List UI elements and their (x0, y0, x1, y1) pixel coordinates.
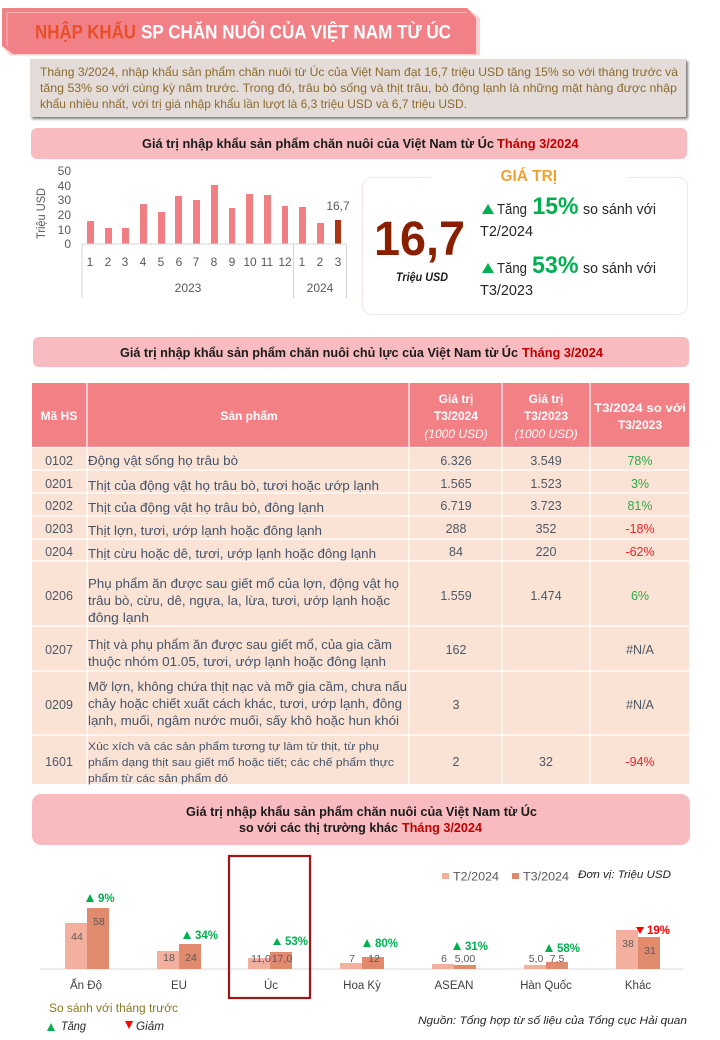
comparison with same month last year: so sánh với (583, 261, 656, 277)
comparison with same month last year (480, 252, 656, 299)
market: ASEAN: 31% (465, 941, 488, 953)
row 0204: 0204 (45, 545, 73, 559)
comparison legend (47, 1003, 178, 1033)
y axis labels: 50 (58, 164, 71, 178)
month labels: 7 (193, 255, 200, 269)
market: Hàn Quốc: Hàn Quốc (520, 980, 572, 992)
month labels: 8 (211, 255, 218, 269)
year labels: 2024 (307, 281, 334, 295)
row 1601: Xúc xích và các sản phẩm tương tự làm từ thịt, từ phụ (88, 741, 379, 753)
table header: T3/2023 (618, 418, 662, 432)
bars (87, 185, 341, 244)
market: ASEAN (432, 941, 488, 992)
row 0202: 0202 (45, 499, 73, 513)
title text: NHẬP KHẨU (35, 22, 136, 44)
market: Úc: 17,0 (272, 953, 292, 965)
row 0202: Thịt của động vật họ trâu bò, đông lạnh (88, 501, 324, 515)
market: Úc (248, 936, 308, 992)
headline unit: Triệu USD (396, 272, 448, 284)
row 0209: Mỡ lợn, không chứa thịt nạc và mỡ gia cầm, chưa nấu (88, 680, 407, 694)
row 0209 (45, 680, 655, 728)
row 0203: 288 (446, 522, 466, 536)
comparison legend: So sánh với tháng trước (49, 1003, 178, 1015)
row 0209: 0209 (45, 698, 73, 712)
market: Hoa Kỳ: Hoa Kỳ (343, 980, 381, 992)
row 0203: 0203 (45, 522, 73, 536)
row 0202 (45, 499, 653, 515)
row 0102: 3.549 (530, 454, 562, 468)
section heading: monthly value: Tháng 3/2024 (497, 137, 579, 151)
market: Hoa Kỳ: 80% (375, 938, 398, 950)
market: EU (157, 930, 218, 992)
row 0206: 1.474 (530, 589, 562, 603)
row 0206: đông lạnh (88, 611, 149, 625)
market: Khác: 19% (647, 925, 670, 937)
value card (362, 166, 688, 314)
month labels: 6 (176, 255, 183, 269)
comparison with previous month (480, 193, 656, 240)
market: Hàn Quốc: 5,0 (529, 953, 543, 965)
row 0209: chảy hoặc chiết xuất cách khác, tươi, ướp lạnh, đông (88, 697, 402, 711)
row 0204: 84 (449, 545, 463, 559)
y axis labels (58, 164, 71, 251)
row 0202: 6.719 (440, 499, 472, 513)
market: Ấn Độ: 58 (93, 916, 105, 928)
month labels: 1 (87, 255, 94, 269)
row 0201: 3% (631, 477, 649, 491)
intro text panel: tăng 53% so với cùng kỳ năm trước. Trong đó, trâu bò sống và thịt trâu, bò đông lạnh là những mặt hàng được nhập (40, 81, 677, 95)
y axis labels: 10 (58, 223, 71, 237)
market: Khác: 31 (644, 945, 656, 957)
section heading: other markets: so với các thị trường khác (239, 821, 398, 835)
row 0206 (45, 577, 649, 625)
market: Ấn Độ (65, 893, 115, 992)
row 0207: 0207 (45, 643, 73, 657)
row 1601: phẩm dạng thịt sau giết mổ hoặc tiết; các chế phẩm thực (88, 757, 395, 769)
table header: Giá trị (439, 392, 473, 406)
comparison with same month last year: T3/2023 (480, 283, 533, 299)
row 0206: Phụ phẩm ăn được sau giết mổ của lợn, động vật họ (88, 577, 399, 591)
month labels: 1 (299, 255, 306, 269)
row 0201: 0201 (45, 477, 73, 491)
market: Hàn Quốc: 58% (557, 943, 580, 955)
row 0203 (45, 522, 655, 538)
row 0206: 0206 (45, 589, 73, 603)
row 1601: 2 (453, 755, 460, 769)
section heading: main products: Tháng 3/2024 (522, 346, 603, 360)
table header: (1000 USD) (424, 427, 488, 441)
row 0102: 78% (627, 454, 653, 468)
comparison with previous month: so sánh với (583, 202, 656, 218)
table body background (32, 447, 689, 784)
market: EU: 34% (195, 930, 218, 942)
product table (32, 383, 689, 785)
market: Úc: 11,0 (251, 953, 271, 965)
market: Úc: Úc (264, 979, 278, 992)
section heading: main products: Giá trị nhập khẩu sản phẩm chăn nuôi chủ lực của Việt Nam từ Úc (120, 345, 518, 360)
row 0207: #N/A (626, 643, 655, 657)
month labels: 2 (105, 255, 112, 269)
title banner (2, 8, 480, 56)
section heading: main products (33, 337, 689, 367)
table header: T3/2023 (524, 409, 568, 423)
comparison with previous month: Tăng (497, 202, 527, 218)
row 0207: thuộc nhóm 01.05, tươi, ướp lạnh hoặc đông lạnh (88, 655, 386, 669)
row 1601: 32 (539, 755, 553, 769)
row 0207: 162 (446, 643, 466, 657)
row 0209: lạnh, muối, ngâm nước muối, sấy khô hoặc hun khói (88, 714, 399, 728)
row 1601: 1601 (45, 755, 73, 769)
market: Úc: 53% (285, 936, 308, 948)
row 0207: Thịt và phụ phẩm ăn được sau giết mổ, của gia cầm (88, 638, 392, 652)
highlight box: Úc (229, 856, 310, 998)
row 0102: Động vật sống họ trâu bò (88, 454, 238, 468)
row 0102 (45, 454, 653, 468)
intro text panel: Tháng 3/2024, nhập khẩu sản phẩm chăn nuôi từ Úc của Việt Nam đạt 16,7 triệu USD tăng 15% so với tháng trước và (40, 64, 678, 79)
table header: Sản phẩm (220, 409, 278, 423)
month labels: 4 (140, 255, 147, 269)
y axis labels: 30 (58, 193, 71, 207)
comparison with previous month: T2/2024 (480, 224, 533, 240)
row 0207 (45, 638, 655, 669)
comparison legend: Tăng (61, 1021, 87, 1033)
row 0204 (45, 545, 655, 561)
row 0102: 6.326 (440, 454, 472, 468)
row 0203: 352 (536, 522, 556, 536)
row 0204: Thịt cừu hoặc dê, tươi, ướp lạnh hoặc đông lạnh (88, 547, 376, 561)
table header: T3/2024 (434, 409, 478, 423)
month labels: 9 (229, 255, 236, 269)
market: EU: EU (171, 980, 187, 992)
title text: SP CHĂN NUÔI CỦA VIỆT NAM TỪ ÚC (141, 22, 451, 44)
year labels (175, 281, 334, 295)
table header (32, 383, 689, 447)
month labels: 3 (122, 255, 129, 269)
row 0202: 81% (627, 499, 653, 513)
comparison with same month last year: 53% (532, 252, 578, 279)
year labels: 2023 (175, 281, 202, 295)
comparison legend: Giảm (136, 1021, 164, 1033)
row 1601: phẩm từ các sản phẩm đó (88, 773, 228, 785)
bar chart: monthly import value (36, 164, 350, 298)
month labels: 12 (278, 255, 292, 269)
card heading: GIÁ TRỊ (500, 166, 557, 185)
market: Khác (616, 925, 670, 992)
row 0203: Thịt lợn, tươi, ướp lạnh hoặc đông lạnh (88, 524, 322, 538)
row 0102: 0102 (45, 454, 73, 468)
month labels: 11 (261, 255, 274, 269)
y axis title: Triệu USD (36, 188, 48, 239)
market: ASEAN: 6 (441, 953, 447, 965)
market: Hoa Kỳ (340, 938, 398, 992)
y axis labels: 20 (58, 208, 71, 222)
row 0201: 1.565 (440, 477, 472, 491)
market: EU: 18 (163, 952, 175, 964)
market: Hoa Kỳ: 7 (349, 953, 355, 965)
row 0201: 1.523 (530, 477, 562, 491)
y axis labels: 0 (64, 237, 71, 251)
source note: Nguồn: Tổng hợp từ số liệu của Tổng cục Hải quan (418, 1015, 687, 1027)
row 0201: Thịt của động vật họ trâu bò, tươi hoặc ướp lạnh (88, 479, 379, 493)
market: ASEAN: 5,00 (455, 953, 475, 965)
intro text panel: khẩu nhiều nhất, với trị giá nhập khẩu lần lượt là 6,3 triệu USD và 6,7 triệu USD. (40, 97, 467, 111)
table header: Giá trị (529, 392, 563, 406)
month labels: 2 (317, 255, 324, 269)
y axis labels: 40 (58, 179, 71, 193)
row 0209: 3 (453, 698, 460, 712)
month labels: 5 (158, 255, 165, 269)
market: Hàn Quốc: 7,5 (550, 953, 564, 965)
table grid (32, 383, 689, 784)
row 0204: -62% (625, 545, 655, 559)
table header: Mã HS (41, 409, 77, 423)
row 0202: 3.723 (530, 499, 562, 513)
market: ASEAN: ASEAN (434, 980, 474, 992)
market comparison chart (40, 856, 683, 998)
month labels: 3 (335, 255, 342, 269)
legend (442, 872, 570, 884)
market: EU: 24 (185, 952, 197, 964)
month labels (87, 255, 342, 269)
table header: T3/2024 so với (594, 401, 686, 415)
section heading: monthly value: Giá trị nhập khẩu sản phẩm chăn nuôi của Việt Nam từ Úc (142, 136, 494, 151)
section heading: other markets: Giá trị nhập khẩu sản phẩm chăn nuôi của Việt Nam từ Úc (186, 804, 537, 819)
market: Khác: 38 (622, 938, 634, 950)
market: Hoa Kỳ: 12 (368, 953, 380, 965)
section heading: monthly value (31, 128, 687, 159)
headline number: 16,7 (374, 213, 465, 266)
baseline (40, 968, 683, 970)
unit note: Đơn vị: Triệu USD (578, 869, 671, 881)
row 0206: trâu bò, cừu, dê, ngựa, la, lừa, tươi, ướp lạnh hoặc (88, 594, 390, 608)
comparison with same month last year: Tăng (497, 261, 527, 277)
row 0206: 6% (631, 589, 649, 603)
market: Ấn Độ: 9% (98, 893, 115, 905)
section heading: other markets: Tháng 3/2024 (402, 821, 482, 835)
row 1601 (45, 741, 655, 785)
row 1601: -94% (625, 755, 655, 769)
section heading: other markets (32, 794, 690, 845)
legend: T2/2024 (453, 872, 500, 884)
comparison with previous month: 15% (532, 193, 578, 220)
row 0203: -18% (625, 522, 655, 536)
row 0209: #N/A (626, 698, 655, 712)
market: Hàn Quốc (520, 943, 580, 992)
axis lines (82, 244, 346, 298)
market: Khác: Khác (625, 980, 651, 992)
row 0201 (45, 477, 649, 493)
market: Ấn Độ: 44 (71, 931, 83, 943)
table header: (1000 USD) (514, 427, 578, 441)
market: Ấn Độ: Ấn Độ (70, 979, 102, 992)
row 0204: 220 (536, 545, 556, 559)
value label: 16,7 (326, 199, 350, 213)
row 0206: 1.559 (440, 589, 472, 603)
month labels: 10 (243, 255, 257, 269)
legend: T3/2024 (523, 872, 570, 884)
intro text panel (30, 59, 688, 119)
